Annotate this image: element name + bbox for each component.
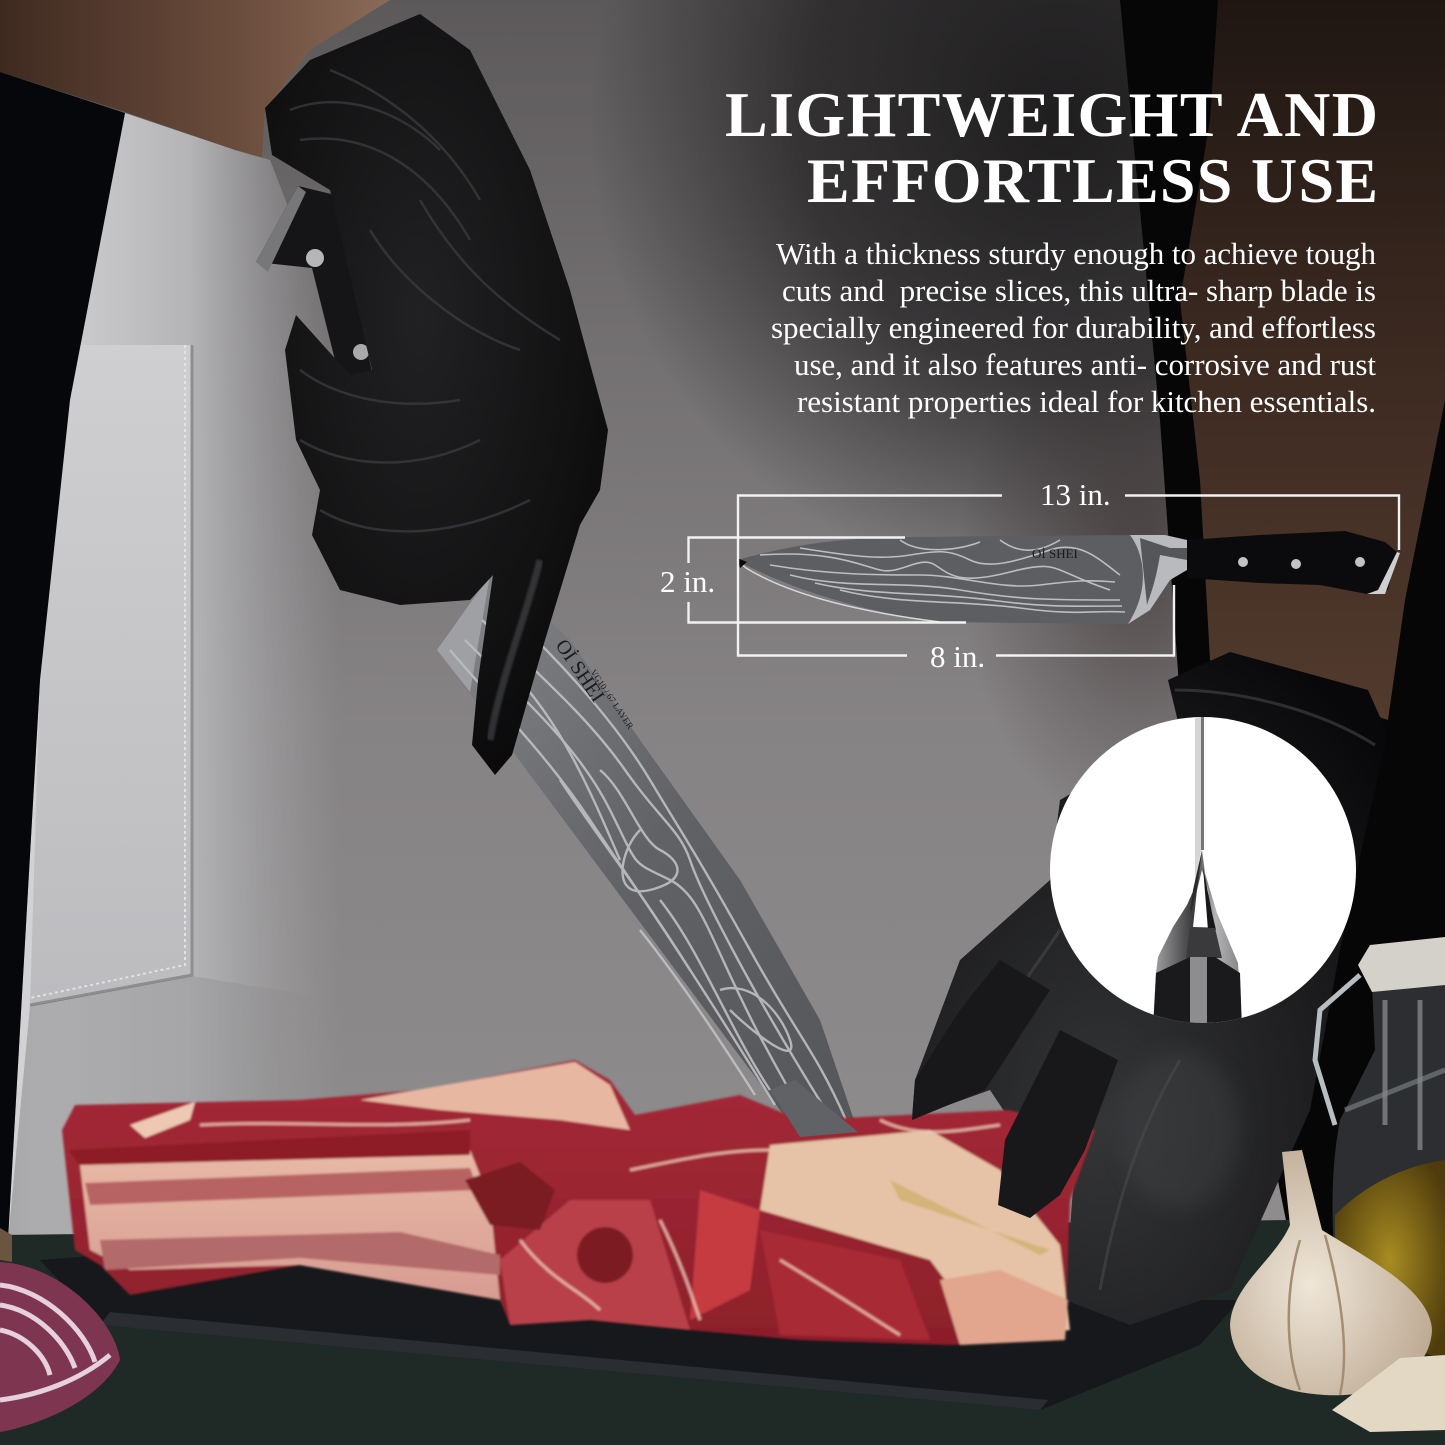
dimension labels xyxy=(660,477,1111,674)
knife tip over meat xyxy=(770,1080,858,1137)
dimension labels: 2 in. xyxy=(660,564,715,599)
oil bottle xyxy=(1315,937,1445,1360)
knife product diagram xyxy=(737,531,1400,624)
description text xyxy=(771,236,1376,419)
meat xyxy=(62,1060,1095,1345)
lower-hand fingers over meat xyxy=(912,960,1118,1218)
raised gloved hand xyxy=(265,14,608,775)
dark left edge xyxy=(0,72,125,1240)
dimension labels: 13 in. xyxy=(1040,477,1111,512)
onion xyxy=(0,1228,120,1432)
slate table xyxy=(0,1220,1445,1445)
description text: use, and it also features anti- corrosive and rust xyxy=(794,347,1376,382)
description text: resistant properties ideal for kitchen essentials. xyxy=(797,384,1376,419)
garlic xyxy=(1230,1150,1445,1432)
description text: specially engineered for durability, and effortless xyxy=(771,310,1376,345)
heading: EFFORTLESS USE xyxy=(807,145,1378,216)
chef forearm, top left xyxy=(0,0,390,158)
upper-right dark torso and arm xyxy=(1120,0,1445,1240)
apron xyxy=(8,113,340,1240)
heading xyxy=(725,79,1378,216)
handle xyxy=(1187,531,1397,594)
dimension labels: 8 in. xyxy=(930,639,985,674)
knife handle in fist xyxy=(256,186,372,380)
description text: With a thickness sturdy enough to achieve tough xyxy=(776,236,1376,271)
bolster xyxy=(1128,535,1187,624)
brand on small knife: Oİ SHEI xyxy=(1032,546,1078,561)
description text: cuts and precise slices, this ultra- sharp blade is xyxy=(782,273,1376,308)
dimension lines xyxy=(688,496,1399,656)
callout: blade edge profile xyxy=(1050,715,1356,1030)
main knife blade xyxy=(437,572,858,1137)
main knife blade: VG10 / 67 LAYER xyxy=(588,668,635,731)
brand etched on blade: Oİ SHEI xyxy=(551,635,609,706)
heading: LIGHTWEIGHT AND xyxy=(725,79,1378,150)
lower gloved hand xyxy=(912,652,1388,1325)
